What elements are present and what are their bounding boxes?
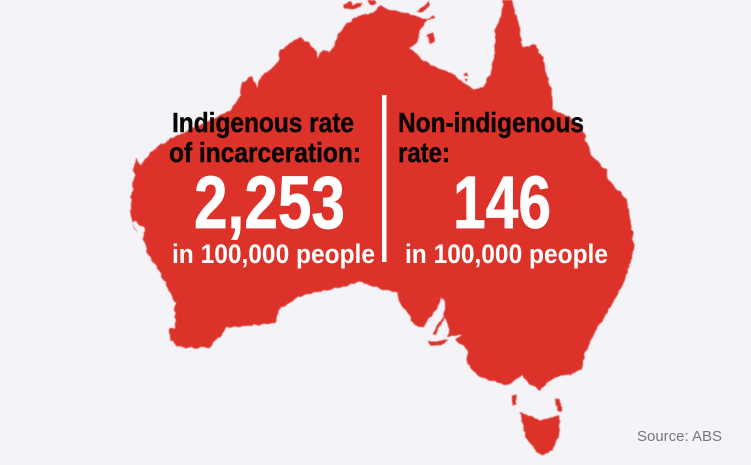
heading: non-indigenous: Non-indigenous [398,107,584,138]
heading: indigenous rate: Indigenous rate [172,107,354,138]
left panel: indigenous rate [169,107,375,269]
divider [382,95,386,262]
right panel: non-indigenous rate [398,107,608,269]
number: 146: 146 [453,161,551,244]
caption: per 100,000: in 100,000 people [405,239,608,269]
number: 2,253: 2,253 [194,161,345,244]
caption: per 100,000: in 100,000 people [172,239,375,269]
map of Australia [130,0,635,456]
heading: rate: rate: [398,137,450,168]
heading: of incarceration: of incarceration: [169,137,361,168]
source note: Source: ABS [637,429,722,445]
